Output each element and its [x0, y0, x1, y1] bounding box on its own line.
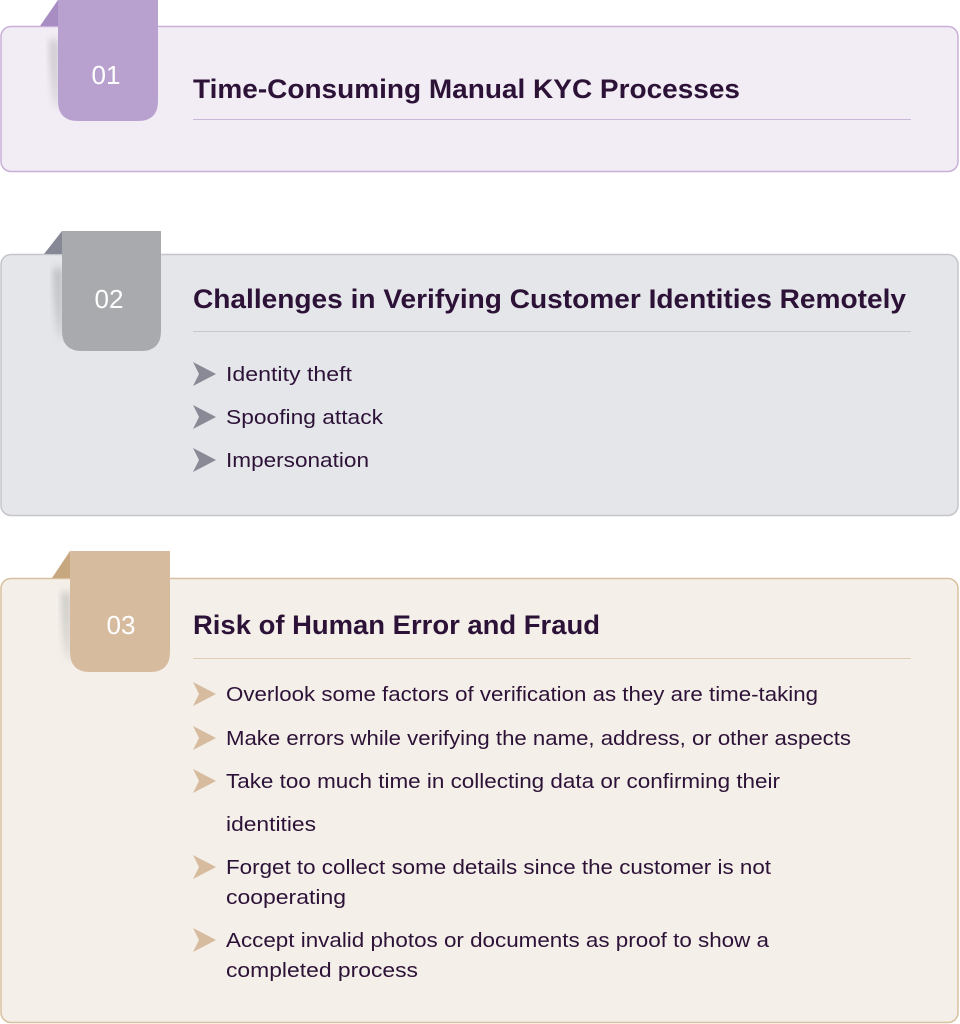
tab 03 — [52, 551, 170, 672]
bullet list 03: Overlook some factors of verification as they are time-taking — [226, 684, 818, 706]
bullet list 03: Make errors while verifying the name, address, or other aspects — [226, 728, 851, 750]
panel: 01 manual KYC — [1, 0, 958, 172]
bullet list 03: identities — [226, 814, 316, 836]
bullet list 03: cooperating — [226, 887, 346, 909]
heading 02: Challenges in Verifying Customer Identities Remotely — [193, 284, 906, 314]
tab 02: 02 — [95, 284, 123, 314]
panel: 03 human error and fraud — [1, 551, 958, 1022]
tab 01: 01 — [92, 60, 120, 90]
bullet list 03 — [193, 682, 851, 982]
tab 01 — [40, 0, 158, 121]
bullet list 03: Forget to collect some details since the customer is not — [226, 857, 771, 879]
bullet list 03: Accept invalid photos or documents as proof to show a — [226, 930, 770, 952]
panel: 02 remote verification — [1, 231, 958, 516]
bullet list 03: Take too much time in collecting data or confirming their — [226, 771, 780, 793]
heading 03: Risk of Human Error and Fraud — [193, 610, 600, 640]
tab 03: 03 — [107, 610, 135, 640]
bullet list 03: completed process — [226, 960, 418, 982]
tab 02 — [44, 231, 161, 351]
bullet list 02: Impersonation — [226, 450, 369, 472]
bullet list 02: Spoofing attack — [226, 407, 384, 429]
bullet list 02: Identity theft — [226, 364, 352, 386]
heading 01: Time-Consuming Manual KYC Processes — [193, 74, 740, 104]
bullet list 02 — [193, 362, 384, 472]
